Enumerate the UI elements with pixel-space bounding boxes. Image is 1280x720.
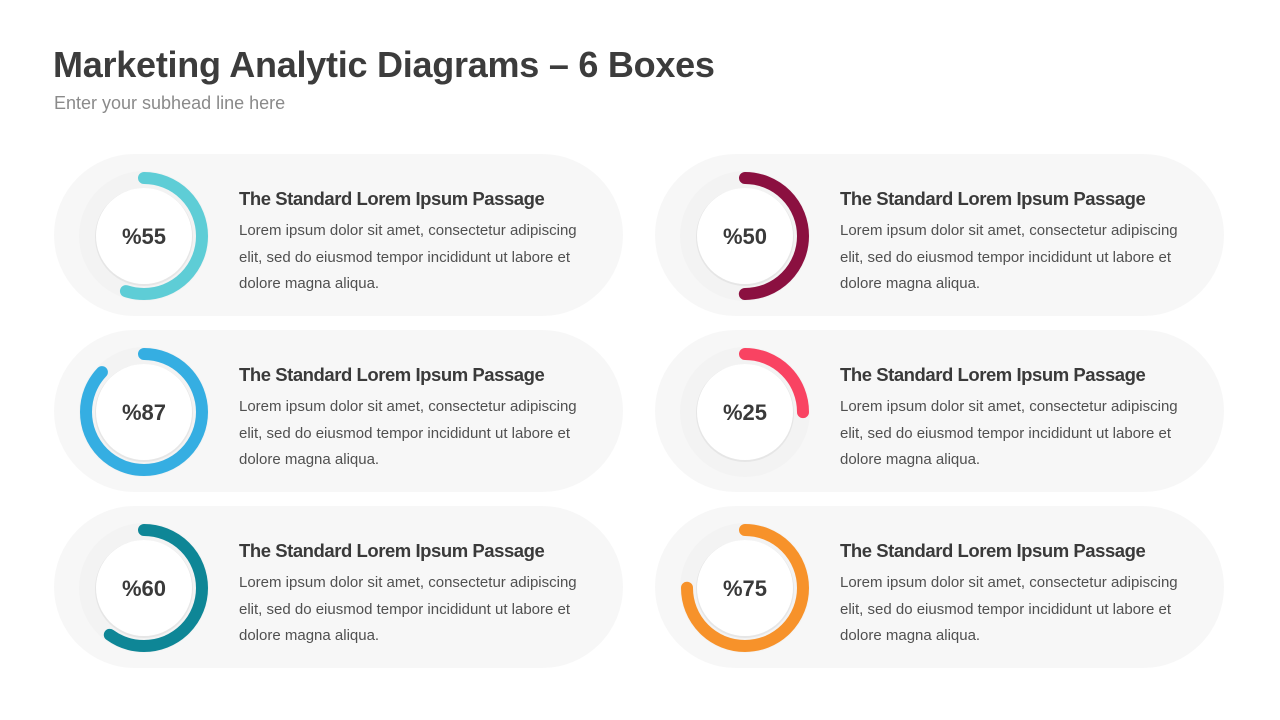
ring chart 55: %55 — [122, 224, 166, 249]
subhead: Enter your subhead line here — [54, 93, 285, 113]
ring chart 50: %50 — [723, 224, 767, 249]
panel: 60 — [54, 506, 623, 668]
heading: The Standard Lorem Ipsum Passage — [239, 540, 544, 561]
ring chart 60: %60 — [122, 576, 166, 601]
body text: Lorem ipsum dolor sit amet, consectetur adipiscing elit, sed do eiusmod tempor incididunt ut labore et dolore magna aliqua. — [840, 574, 1178, 644]
body text: Lorem ipsum dolor sit amet, consectetur adipiscing elit, sed do eiusmod tempor incididunt ut labore et dolore magna aliqua. — [239, 574, 577, 644]
heading: The Standard Lorem Ipsum Passage — [840, 364, 1145, 385]
panel: 87 — [54, 330, 623, 492]
panel: 25 — [655, 330, 1224, 492]
heading: The Standard Lorem Ipsum Passage — [840, 188, 1145, 209]
ring chart 50 — [696, 172, 809, 300]
ring chart 75: %75 — [723, 576, 767, 601]
ring chart 25 — [696, 348, 809, 462]
panel: 50 — [655, 154, 1224, 316]
panel: 55 — [54, 154, 623, 316]
body text: Lorem ipsum dolor sit amet, consectetur adipiscing elit, sed do eiusmod tempor incididunt ut labore et dolore magna aliqua. — [239, 398, 577, 468]
ring chart 25: %25 — [723, 400, 767, 425]
body text: Lorem ipsum dolor sit amet, consectetur adipiscing elit, sed do eiusmod tempor incididunt ut labore et dolore magna aliqua. — [840, 222, 1178, 292]
heading: The Standard Lorem Ipsum Passage — [239, 188, 544, 209]
panel: 75 — [655, 506, 1224, 668]
heading: The Standard Lorem Ipsum Passage — [239, 364, 544, 385]
heading: The Standard Lorem Ipsum Passage — [840, 540, 1145, 561]
body text: Lorem ipsum dolor sit amet, consectetur adipiscing elit, sed do eiusmod tempor incididunt ut labore et dolore magna aliqua. — [239, 222, 577, 292]
ring chart 60 — [95, 524, 208, 652]
title: Marketing Analytic Diagrams – 6 Boxes — [53, 44, 715, 85]
ring chart 87: %87 — [122, 400, 166, 425]
ring chart 87 — [80, 348, 208, 476]
body text: Lorem ipsum dolor sit amet, consectetur adipiscing elit, sed do eiusmod tempor incididunt ut labore et dolore magna aliqua. — [840, 398, 1178, 468]
ring chart 75 — [681, 524, 809, 652]
ring chart 55 — [95, 172, 208, 300]
